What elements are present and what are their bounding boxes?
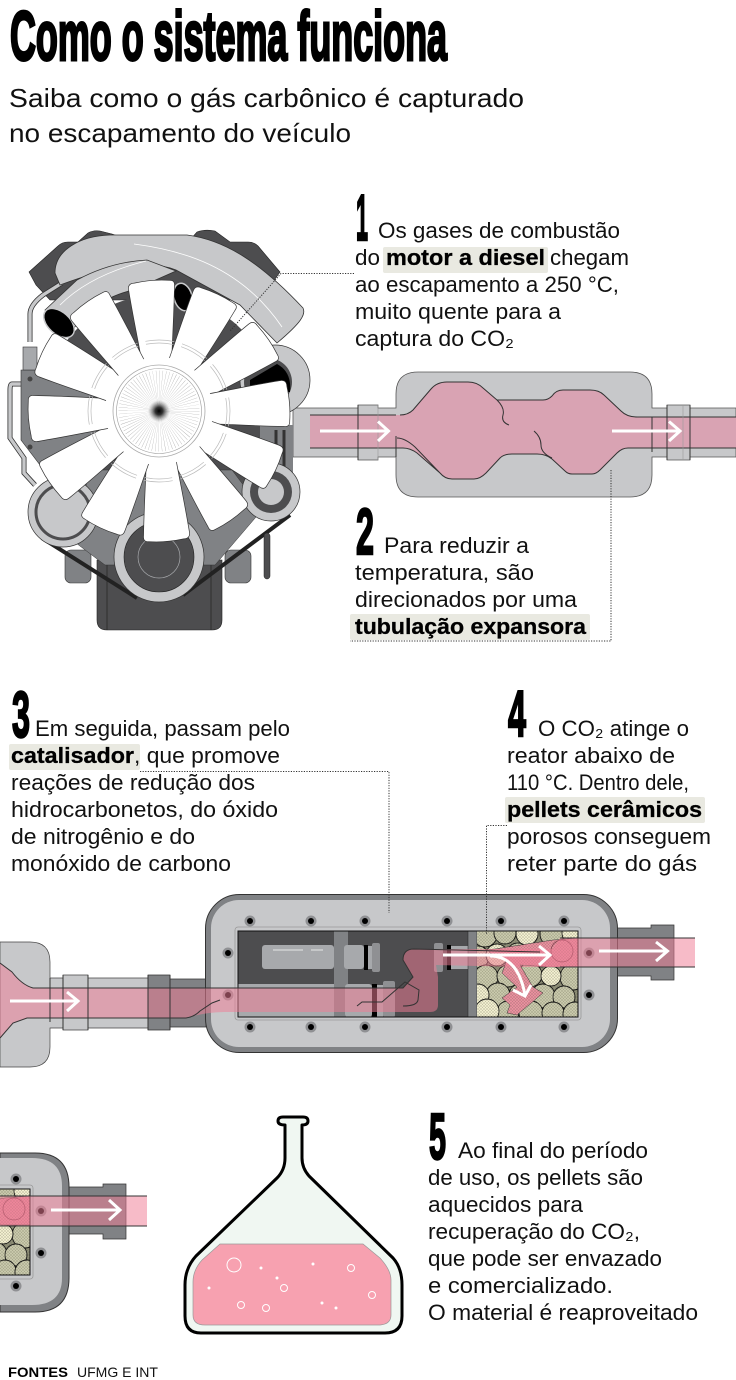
step 2: temperatura, são bbox=[355, 560, 534, 585]
step 4: 4 bbox=[508, 677, 526, 750]
ceramic pellets bbox=[477, 932, 578, 1016]
step 1 bbox=[355, 181, 629, 351]
step 2: Para reduzir a bbox=[384, 533, 530, 558]
illustration: diesel engine bbox=[10, 230, 310, 630]
step 4: pellets cerâmicos bbox=[507, 797, 702, 822]
step 4 bbox=[505, 677, 711, 876]
step 4: 110 °C. Dentro dele, bbox=[507, 770, 689, 795]
step 2: 2 bbox=[356, 495, 374, 568]
step 1: chegam bbox=[550, 245, 629, 270]
step 1: motor a diesel bbox=[386, 245, 545, 270]
outlet pipe bbox=[612, 925, 674, 980]
step 5: recuperação do CO₂, bbox=[428, 1219, 640, 1244]
step 1: 1 bbox=[356, 181, 368, 254]
step 4: porosos conseguem bbox=[507, 824, 711, 849]
valve covers bbox=[29, 230, 280, 300]
arrow bbox=[51, 1200, 120, 1220]
step 3: reações de redução dos bbox=[11, 770, 255, 795]
step 2: direcionados por uma bbox=[355, 587, 578, 612]
leader line 2 bbox=[350, 470, 611, 641]
subtitle: Saiba como o gás carbônico é capturado bbox=[9, 83, 524, 113]
arrow bbox=[612, 422, 680, 441]
step 3: monóxido de carbono bbox=[11, 851, 231, 876]
right pulley bbox=[240, 345, 310, 480]
step 4: reter parte do gás bbox=[507, 851, 697, 876]
step 5: que pode ser envazado bbox=[428, 1246, 662, 1271]
step 4: O CO₂ atinge o bbox=[538, 716, 689, 741]
step 5: O material é reaproveitado bbox=[428, 1300, 698, 1325]
step 5: de uso, os pellets são bbox=[428, 1165, 643, 1190]
illustration: catalyst and reactor bbox=[0, 894, 695, 1067]
step 5: e comercializado. bbox=[428, 1273, 613, 1298]
step 5: aquecidos para bbox=[428, 1192, 584, 1217]
belts bbox=[42, 515, 290, 598]
arrow bbox=[10, 992, 78, 1011]
catalyst parts bbox=[238, 931, 477, 1017]
step 3: de nitrogênio e do bbox=[11, 824, 195, 849]
step 3 bbox=[9, 678, 290, 876]
step 3: 3 bbox=[12, 678, 30, 751]
engine block base bbox=[65, 550, 251, 630]
pulley lower left bbox=[28, 477, 98, 547]
liquid bbox=[193, 1244, 391, 1325]
step 1: captura do CO₂ bbox=[355, 326, 514, 351]
illustration: reactor end bbox=[0, 1153, 147, 1312]
step 3: catalisador bbox=[11, 743, 134, 768]
pulley lower right bbox=[242, 463, 300, 521]
arrow bbox=[443, 946, 550, 965]
arrow bbox=[490, 956, 531, 996]
step 2: tubulação expansora bbox=[355, 614, 587, 639]
subtitle bbox=[9, 83, 524, 148]
fan bbox=[27, 279, 291, 543]
step 4: reator abaixo de bbox=[507, 743, 675, 768]
arrow bbox=[599, 942, 668, 961]
sources: FONTES bbox=[8, 1364, 68, 1380]
step 3: hidrocarbonetos, do óxido bbox=[11, 797, 278, 822]
step 1: do bbox=[355, 245, 380, 270]
leader line 3 bbox=[140, 772, 389, 913]
step 3: Em seguida, passam pelo bbox=[35, 716, 290, 741]
bubbles bbox=[208, 1258, 376, 1312]
intake manifold bbox=[38, 235, 304, 343]
gas flow bbox=[0, 938, 695, 1038]
sources bbox=[8, 1364, 158, 1380]
step 5: Ao final do período bbox=[458, 1138, 648, 1163]
step 1: ao escapamento a 250 °C, bbox=[355, 272, 619, 297]
subtitle: no escapamento do veículo bbox=[9, 118, 351, 148]
crank pulley bbox=[114, 512, 204, 602]
leader line 4 bbox=[486, 826, 507, 935]
bolts bbox=[222, 916, 594, 1032]
dipstick bbox=[264, 533, 270, 579]
illustration: exhaust expansion pipe bbox=[293, 372, 736, 497]
reactor housing bbox=[206, 894, 618, 1052]
step 2 bbox=[350, 495, 590, 640]
step 5 bbox=[428, 1100, 698, 1325]
dark coupling bbox=[148, 975, 206, 1030]
step 1: muito quente para a bbox=[355, 299, 562, 324]
step 5: 5 bbox=[429, 1100, 446, 1173]
step 3: , que promove bbox=[134, 743, 280, 768]
engine body bbox=[43, 295, 275, 527]
lower plate bbox=[72, 470, 262, 565]
flow outlines bbox=[0, 938, 695, 1038]
step 1: Os gases de combustão bbox=[378, 218, 620, 243]
expansion pipe end bbox=[0, 942, 148, 1067]
left bracket bbox=[10, 283, 110, 485]
leader line 1 bbox=[230, 274, 354, 331]
sources: UFMG E INT bbox=[77, 1364, 158, 1380]
illustration: flask bbox=[185, 1117, 402, 1333]
reactor window bbox=[238, 931, 578, 1017]
arrow bbox=[320, 422, 388, 441]
